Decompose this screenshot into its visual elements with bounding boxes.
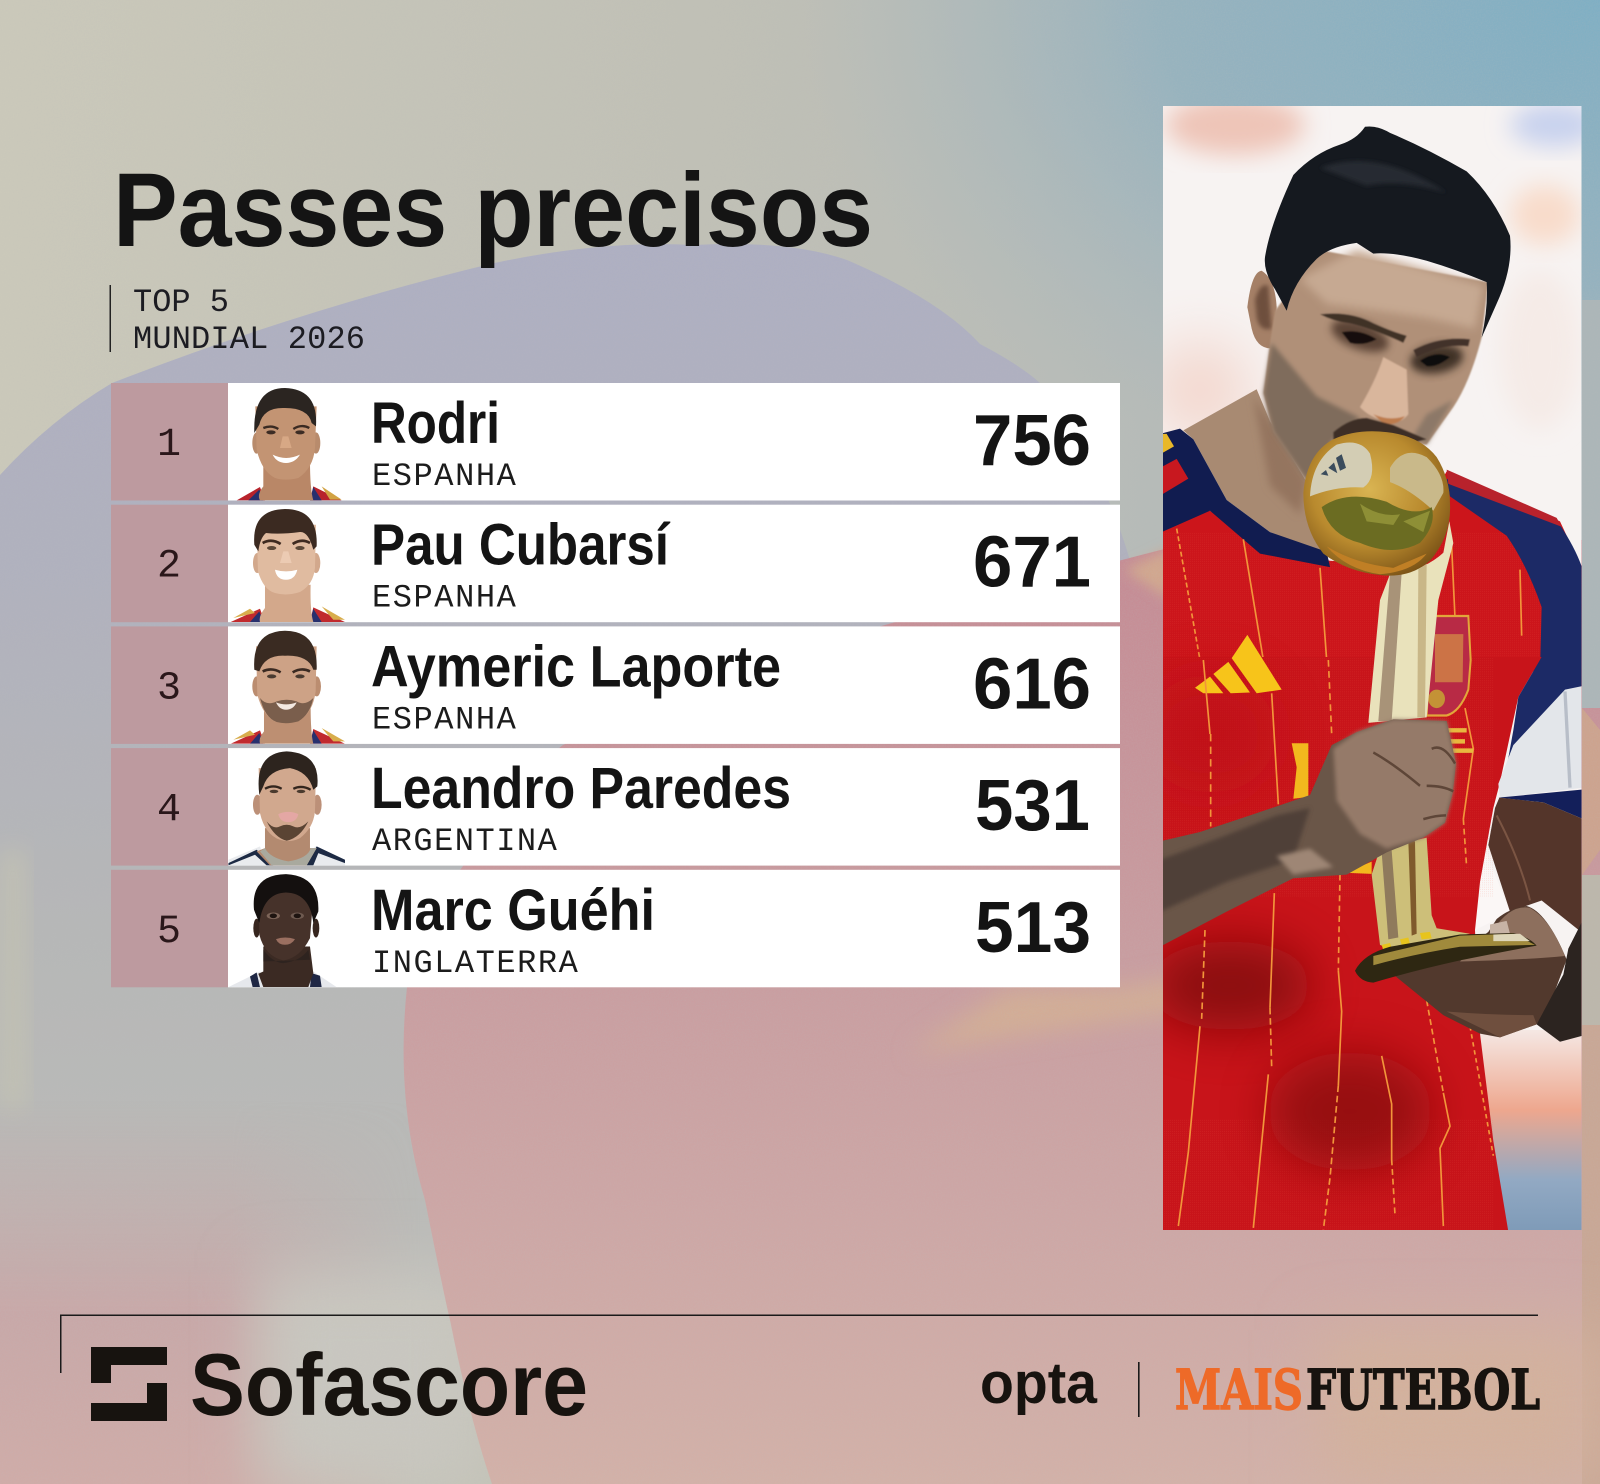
shirt stripes bbox=[1177, 529, 1522, 660]
footer frame line bbox=[60, 1314, 1538, 1373]
neck bbox=[1183, 389, 1330, 555]
row 1: Rodri: Rodri bbox=[371, 391, 500, 456]
row 3: Aymeric Laporte bbox=[111, 626, 1120, 744]
row 2: Pau Cubarsí: Pau Cubarsí bbox=[371, 513, 671, 578]
divider between logos bbox=[1138, 1362, 1140, 1417]
row 4: Leandro Paredes: 531 bbox=[975, 766, 1090, 846]
row 2: Pau Cubarsí: ESPANHA bbox=[372, 580, 517, 617]
crest bbox=[1427, 616, 1471, 715]
portrait: Rodri bbox=[237, 388, 342, 500]
row 1: Rodri: 1 bbox=[157, 423, 181, 468]
adidas logo bbox=[1195, 635, 1282, 693]
logo: Maisfutebol: MAIS bbox=[1175, 1357, 1303, 1422]
base bbox=[1355, 933, 1537, 983]
wrist dark bbox=[1537, 919, 1583, 1042]
row 5: Marc Guéhi: 5 bbox=[157, 910, 181, 955]
face bbox=[1263, 250, 1488, 480]
row 5: Marc Guéhi: 513 bbox=[975, 888, 1091, 968]
row 5: Marc Guéhi: Marc Guéhi bbox=[371, 878, 655, 943]
row 1: Rodri: 756 bbox=[973, 401, 1091, 481]
photo: trophy ball in upper crop coords bbox=[1303, 431, 1450, 576]
row 3: Aymeric Laporte: 3 bbox=[157, 666, 181, 711]
collar bbox=[1160, 429, 1330, 567]
title: Passes precisos bbox=[113, 152, 873, 269]
portrait: Marc Guéhi bbox=[228, 874, 337, 987]
trophy stem bbox=[1368, 521, 1453, 723]
row 4: Leandro Paredes: ARGENTINA bbox=[372, 823, 558, 860]
navy sleeve bbox=[1447, 479, 1583, 671]
row 5: Marc Guéhi bbox=[111, 870, 1120, 987]
subtitle: top 5 mundial 2026: MUNDIAL 2026 bbox=[133, 321, 365, 358]
row 4: Leandro Paredes bbox=[111, 748, 1120, 866]
logo: Maisfutebol bbox=[1175, 1357, 1540, 1422]
player photo: Rodri kissing golden trophy bbox=[1143, 95, 1600, 1233]
ear bbox=[1247, 271, 1277, 348]
subtitle: top 5 mundial 2026: TOP 5 bbox=[133, 284, 229, 321]
hair bbox=[1265, 126, 1511, 337]
portrait: Aymeric Laporte bbox=[231, 631, 345, 744]
row 4: Leandro Paredes: Leandro Paredes bbox=[371, 756, 791, 821]
row 5: Marc Guéhi: INGLATERRA bbox=[372, 945, 579, 982]
number 10 fragment bbox=[1292, 743, 1372, 874]
portrait: Leandro Paredes bbox=[228, 751, 345, 865]
trophy lower stem and base bbox=[1372, 838, 1470, 949]
row 1: Rodri: ESPANHA bbox=[372, 458, 517, 495]
lower hand bbox=[1393, 906, 1567, 1037]
row 4: Leandro Paredes: 4 bbox=[157, 788, 181, 833]
white armband and sleeve bbox=[1507, 657, 1583, 767]
portrait: Pau Cubarsí bbox=[231, 509, 345, 622]
subtitle: top 5 mundial 2026 bbox=[110, 284, 365, 358]
photo: lower body in lower crop coords bbox=[1143, 521, 1583, 1233]
logo: opta: opta bbox=[980, 1351, 1098, 1416]
row 3: Aymeric Laporte: Aymeric Laporte bbox=[371, 634, 781, 699]
row 1: Rodri bbox=[111, 383, 1120, 500]
red shirt bbox=[1160, 657, 1542, 1232]
row 2: Pau Cubarsí: 671 bbox=[973, 523, 1091, 603]
row 3: Aymeric Laporte: 616 bbox=[973, 644, 1091, 724]
photo: upper body in upper crop coords bbox=[1160, 126, 1583, 671]
row 3: Aymeric Laporte: ESPANHA bbox=[372, 701, 517, 738]
bg gap bbox=[1475, 838, 1510, 930]
forearm bbox=[1160, 719, 1456, 947]
right arm bbox=[1488, 798, 1583, 934]
row 2: Pau Cubarsí bbox=[111, 505, 1120, 622]
stripes bbox=[1178, 660, 1493, 1230]
logo: Sofascore: Sofascore bbox=[190, 1335, 588, 1434]
row 2: Pau Cubarsí: 2 bbox=[157, 545, 181, 590]
